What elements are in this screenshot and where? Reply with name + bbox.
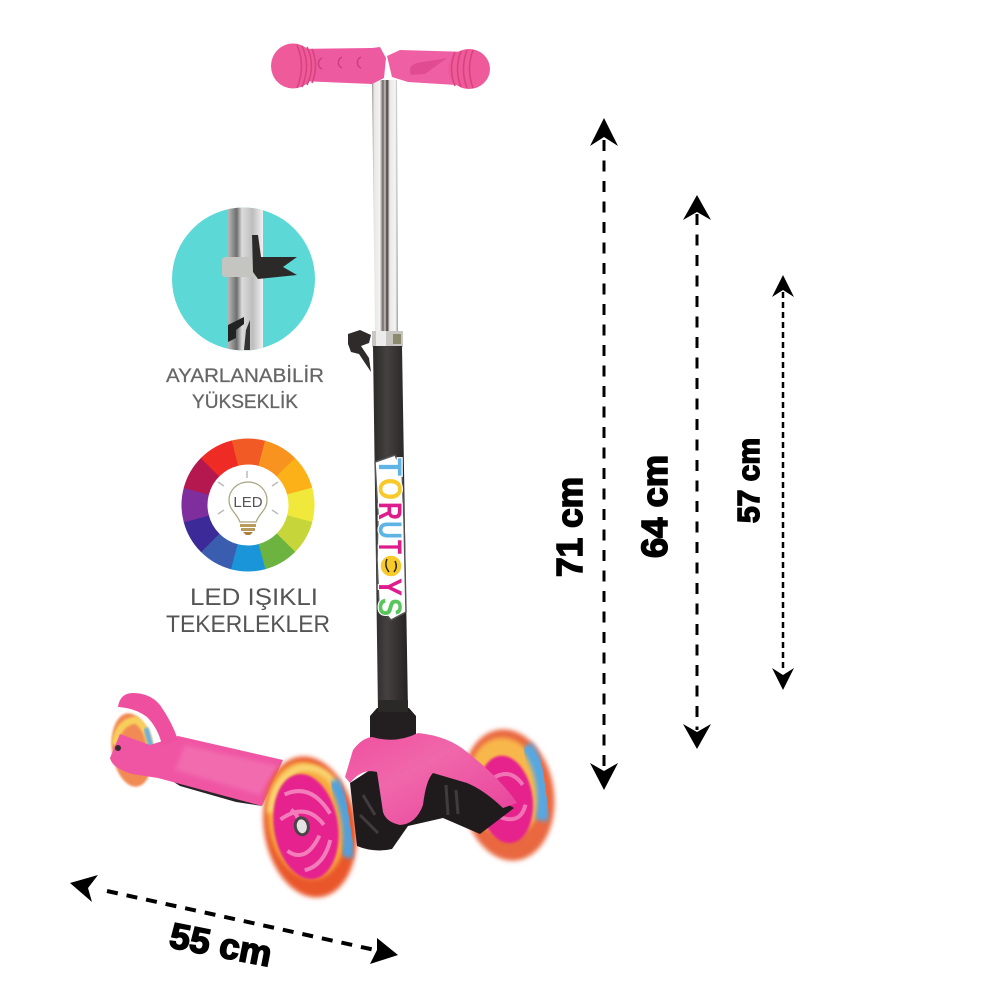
label: 55 cm: 55 cm [166, 915, 275, 975]
Torutoys sticker: R [372, 502, 408, 520]
Torutoys sticker: Y [372, 578, 408, 596]
black lower tube [373, 346, 408, 712]
right front LED wheel [453, 723, 563, 867]
rear wheel [107, 711, 157, 789]
label: 64 cm: 64 cm [634, 455, 675, 558]
Torutoys sticker: T [372, 540, 408, 554]
label: 71 cm: 71 cm [549, 477, 590, 577]
text: adjustable height [166, 366, 324, 413]
Torutoys sticker: O [372, 478, 408, 500]
deck underside [158, 772, 262, 806]
text: adjustable height: AYARLANABİLİR [166, 366, 324, 387]
black fork wheels mount [350, 768, 514, 850]
text: adjustable height: YÜKSEKLİK [192, 392, 298, 413]
scooter handlebar grips [271, 44, 490, 89]
chrome telescopic tubes [372, 80, 398, 332]
dimension arrow: 55 cm [70, 875, 398, 964]
front left LED wheel [253, 750, 367, 904]
height lock collar and lever [348, 330, 403, 372]
Torutoys sticker: T [372, 458, 408, 476]
dimension arrow: 57 cm [772, 275, 794, 690]
text: LED wheels: LED IŞIKLI [190, 584, 318, 611]
Torutoys sticker [372, 455, 408, 620]
Torutoys sticker: S [372, 598, 408, 616]
text: LED wheels [166, 584, 330, 638]
icon: LED colour wheel [172, 429, 324, 581]
dimension arrow: 71 cm [590, 118, 618, 790]
icon: LED colour wheel: LED [233, 494, 263, 511]
deck [110, 734, 283, 806]
label: 57 cm: 57 cm [731, 438, 766, 523]
rear fender brake [118, 693, 178, 745]
pink front fork [345, 733, 517, 825]
Torutoys sticker: U [372, 521, 408, 539]
dimension arrow: 64 cm [683, 195, 711, 749]
icon: adjustable height badge [172, 205, 315, 355]
text: LED wheels: TEKERLEKLER [166, 611, 330, 638]
steering collar [370, 700, 416, 742]
